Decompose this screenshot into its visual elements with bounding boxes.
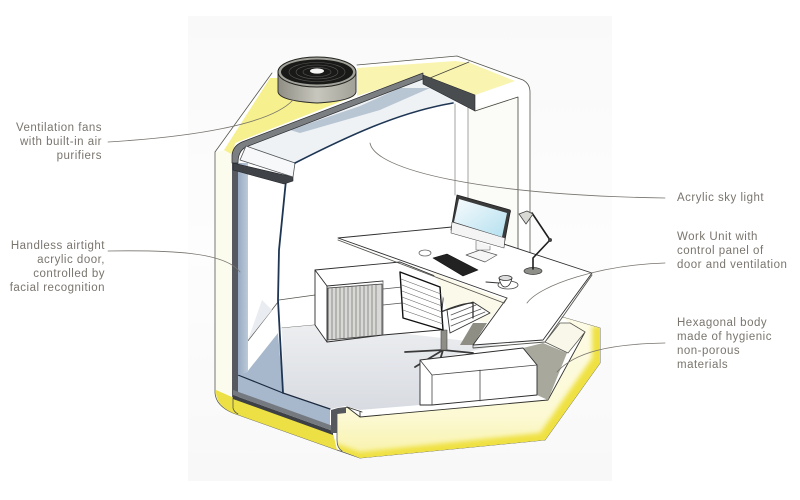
label: hexagonal body: made of hygienic <box>677 331 772 343</box>
door edge <box>278 163 295 393</box>
label: hexagonal body: Hexagonal body <box>677 317 767 329</box>
label: ventilation fans: Ventilation fans <box>16 122 102 134</box>
label: acrylic door <box>10 240 105 294</box>
acrylic sky light <box>232 73 475 184</box>
label: work unit: control panel of <box>677 245 764 257</box>
label: hexagonal body: non-porous <box>677 345 740 357</box>
star base <box>405 350 473 367</box>
storage cabinet <box>315 262 445 342</box>
label: hexagonal body: materials <box>677 359 728 371</box>
label: ventilation fans <box>16 122 102 162</box>
label: acrylic door: acrylic door, <box>37 254 105 266</box>
back wall baseboard <box>247 295 315 342</box>
right beam <box>423 75 475 111</box>
frame <box>451 195 510 245</box>
leader lines <box>108 100 665 372</box>
desk lamp <box>519 211 552 274</box>
glass streak <box>290 88 430 133</box>
coffee cup <box>486 276 518 289</box>
label: work unit <box>677 231 787 271</box>
unit body <box>420 348 537 405</box>
leader: hexagonal body <box>557 343 665 372</box>
acrylic door glass <box>232 160 346 435</box>
base <box>524 268 542 274</box>
keyboard <box>433 254 478 276</box>
joints <box>548 238 552 242</box>
arms <box>532 213 550 269</box>
fan rings <box>289 62 345 82</box>
base front band <box>337 317 600 458</box>
leader: door <box>108 251 240 272</box>
office chair <box>400 272 490 367</box>
label: ventilation fans: purifiers <box>57 150 102 162</box>
base left band <box>216 390 337 450</box>
desk top <box>338 227 592 345</box>
yellow hexagonal base <box>216 317 606 464</box>
shutter slats <box>332 284 376 340</box>
desk edge <box>338 240 592 348</box>
leader: sky light <box>370 143 665 198</box>
back ribs <box>401 279 443 324</box>
label: acrylic sky light: Acrylic sky light <box>677 192 764 204</box>
interior fill <box>215 56 600 458</box>
door sill lines <box>238 375 330 409</box>
fan hub <box>310 68 324 74</box>
curved glass edge <box>295 103 453 163</box>
low front unit <box>420 323 585 405</box>
illustration: hexagonal work pod cutaway <box>108 56 666 458</box>
mouse <box>419 250 431 256</box>
screen <box>454 199 507 237</box>
stand <box>466 250 497 262</box>
rear shadow area <box>523 343 567 400</box>
fan body <box>278 72 356 103</box>
seam <box>233 397 342 451</box>
wall tint <box>215 148 235 395</box>
roller shutter <box>328 284 382 340</box>
background panel <box>188 16 612 481</box>
backrest <box>400 272 443 330</box>
ventilation fan <box>278 57 356 103</box>
shade <box>519 211 533 224</box>
glass <box>240 78 472 163</box>
base yellow glow <box>335 326 606 464</box>
floor shadow <box>460 323 487 345</box>
fan grille <box>281 60 353 84</box>
bottom frame end post <box>331 407 346 433</box>
glass panel <box>237 333 330 427</box>
interior vertical lines <box>455 104 468 211</box>
leader: work unit <box>527 263 665 303</box>
armrest <box>441 303 473 318</box>
drawer lines <box>383 281 402 335</box>
right wall tint <box>468 97 518 252</box>
pod body <box>215 56 600 458</box>
frame top <box>232 73 423 163</box>
roof yellow left <box>224 78 355 155</box>
chin <box>451 222 505 248</box>
floor <box>282 325 500 410</box>
door jamb <box>232 163 248 397</box>
label: hexagonal body <box>677 317 772 371</box>
seat <box>447 302 490 333</box>
roof inner edge <box>430 62 518 252</box>
work desk <box>338 227 592 348</box>
seat ribs <box>451 305 485 326</box>
label: work unit: door and ventilation <box>677 259 787 271</box>
left beam <box>233 163 293 184</box>
under-desk wall and shadow <box>432 272 505 345</box>
roof yellow right <box>357 61 515 96</box>
column <box>441 330 447 350</box>
wall section <box>545 323 585 353</box>
label: acrylic door: facial recognition <box>10 282 105 294</box>
fan top <box>278 57 356 87</box>
unit edges <box>420 360 537 405</box>
label: ventilation fans: with built-in air <box>20 136 102 148</box>
label: acrylic door: controlled by <box>33 268 105 280</box>
label: work unit: Work Unit with <box>677 231 758 243</box>
roof outline <box>215 56 600 458</box>
left beam top <box>240 146 295 177</box>
reflection <box>248 300 272 340</box>
back panel <box>432 272 505 323</box>
leader: ventilation fans <box>108 100 293 142</box>
cabinet faces <box>315 262 445 342</box>
base top edge <box>337 323 585 417</box>
monitor <box>451 195 510 262</box>
label: acrylic door: Handless airtight <box>11 240 105 252</box>
bottom frame <box>233 395 333 435</box>
